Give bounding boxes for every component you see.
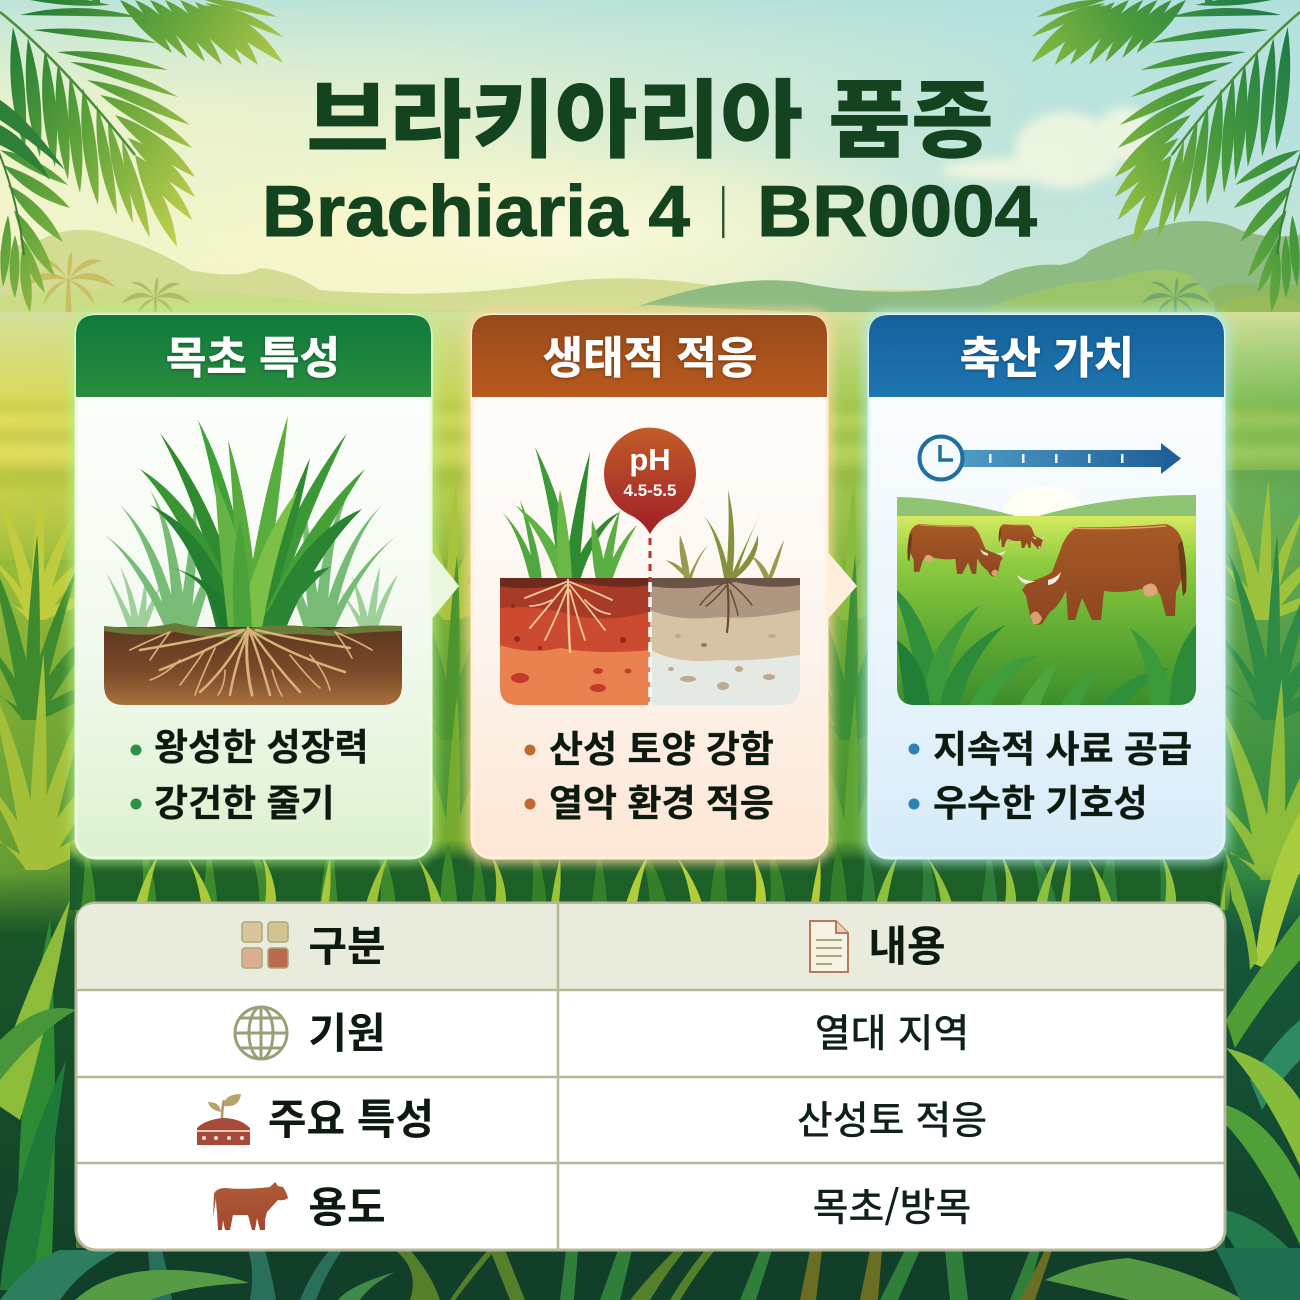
row: 용도 [213, 1174, 971, 1235]
panel heading: 생태적 적응 [543, 322, 757, 386]
row: 용도: 용도 [308, 1174, 386, 1235]
timeline arrow with clock [920, 436, 1181, 480]
panel heading: 목초 특성 [166, 322, 340, 386]
bullet list: 우수한 기호성 [933, 773, 1148, 827]
lower grass base [0, 470, 1300, 1300]
panel: 축산 가치 [863, 309, 1230, 864]
row: 주요 특성: 산성토 적응 [797, 1090, 987, 1146]
panel heading: 축산 가치 [960, 322, 1134, 386]
panel heading [869, 315, 1224, 397]
pH pin: 4.5-5.5 [624, 481, 676, 500]
arrow to panel 2 [431, 551, 459, 620]
foreground leaves [897, 590, 1196, 705]
row: 용도: 목초/방목 [813, 1177, 971, 1233]
row: 주요 특성: 주요 특성 [268, 1086, 434, 1147]
table header row: 내용 [868, 913, 946, 974]
title: 브라키아리아 품종 [306, 52, 994, 175]
icon: globe [235, 1007, 287, 1059]
bullet list: 강건한 줄기 [154, 773, 335, 827]
healthy roots [525, 580, 612, 652]
table [76, 903, 1225, 1250]
icon: cow [213, 1182, 288, 1230]
stressed grass [664, 490, 784, 578]
panel: 목초 특성 [70, 309, 459, 864]
subtitle: Brachiaria 4 [262, 172, 690, 252]
panel: 생태적 적응 [466, 309, 857, 864]
distant palm trees [22, 252, 1300, 326]
grass and leaves at bottom edge [0, 1248, 1300, 1300]
panel heading [472, 315, 827, 397]
row dividers [77, 904, 1224, 1249]
bullet list: 지속적 사료 공급 [933, 719, 1192, 773]
palm fronds: top left [0, 0, 283, 312]
distant hills [0, 221, 1300, 340]
bullet list: 산성 토양 강함 [549, 719, 774, 773]
bullet list [130, 717, 369, 827]
icon: category grid [242, 922, 288, 968]
bullet list [908, 719, 1192, 827]
bullet list [524, 719, 774, 827]
big margin leaves [0, 812, 1300, 1300]
illustration: grass plant with roots [104, 416, 402, 705]
bullet list: 왕성한 성장력 [154, 717, 369, 771]
table header row [77, 904, 1224, 989]
healthy grass [502, 447, 637, 580]
grass tufts mid [0, 653, 1300, 880]
weak roots [700, 580, 752, 632]
illustration: cattle grazing [897, 486, 1196, 705]
icon: document [810, 921, 848, 972]
clouds [940, 107, 1155, 188]
icon: sprout in soil [197, 1094, 250, 1145]
soil [104, 623, 402, 705]
pH pin [604, 428, 696, 534]
grass band between cards and table [70, 842, 1232, 910]
subtitle: BR0004 [757, 172, 1037, 252]
title [262, 52, 1037, 252]
bullet list: 열악 환경 적응 [549, 773, 774, 827]
arrow to panel 3 [827, 551, 857, 620]
soil layers [500, 578, 800, 705]
row: 주요 특성 [197, 1086, 987, 1147]
panel heading [76, 315, 431, 397]
grass tufts far [0, 480, 1300, 740]
illustration: soil comparison [500, 428, 800, 705]
row: 기원: 기원 [308, 1000, 386, 1061]
table header row: 구분 [308, 913, 386, 974]
field [0, 312, 1300, 560]
subtitle [262, 172, 1037, 252]
row: 기원: 열대 지역 [815, 1003, 969, 1059]
dashed divider [648, 538, 652, 582]
palm fronds: top right [1031, 0, 1300, 312]
row: 기원 [235, 1000, 969, 1061]
pH pin: pH [629, 442, 671, 477]
